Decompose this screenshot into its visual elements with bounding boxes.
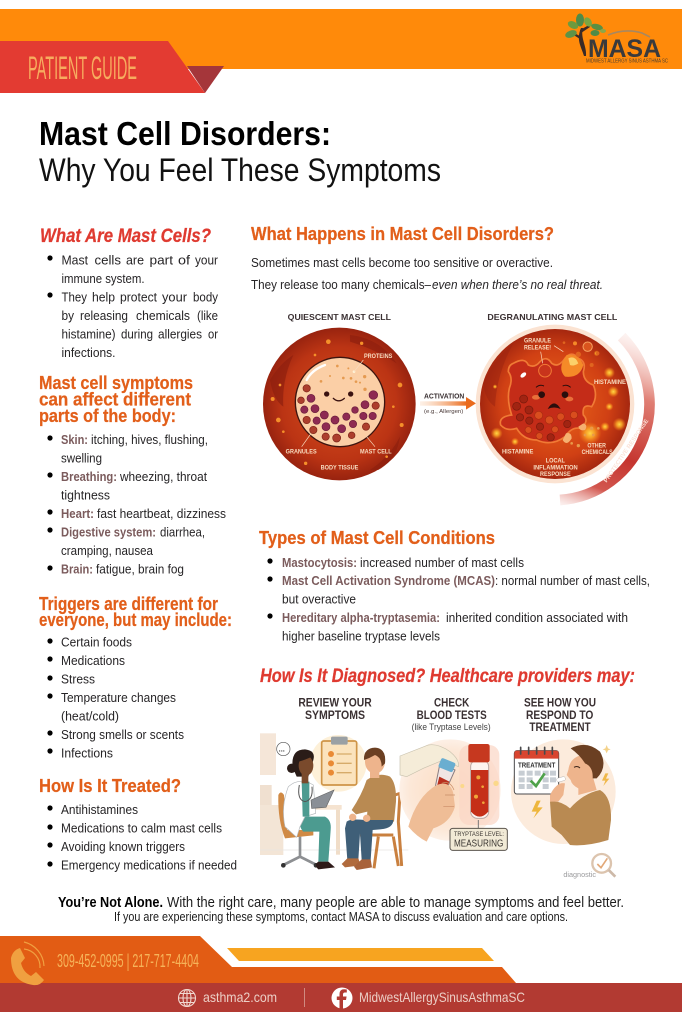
- panel: types: inherited condition associated with: [446, 610, 628, 625]
- diagram labels: QUIESCENT MAST CELL: [288, 312, 391, 322]
- panel: treatment: Medications to calm mast cells: [61, 820, 222, 836]
- closing message: With the right care, many people are able to manage symptoms and feel better.: [167, 895, 624, 911]
- panel: symptoms: [39, 372, 226, 576]
- diagram labels: [288, 312, 617, 322]
- panel: what are mast cells: allergies: [158, 326, 202, 342]
- panel: triggers: Strong smells or scents: [61, 727, 184, 742]
- panel: triggers: Stress: [61, 672, 95, 686]
- panel: triggers: [39, 593, 232, 760]
- panel: what are mast cells: or: [208, 326, 219, 342]
- footer shapes: [0, 936, 682, 1012]
- step 2: check blood tests: [399, 697, 507, 850]
- header band: [0, 9, 682, 69]
- panel: symptoms: Mast cell symptoms: [39, 372, 193, 393]
- facebook: MidwestAllergySinusAsthmaSC: [359, 989, 525, 1005]
- diagnostic watermark: diagnostic: [563, 872, 597, 879]
- degranulating mast cell: [476, 325, 634, 483]
- degranulating mast cell: INFLAMMATION: [533, 465, 578, 471]
- degranulating mast cell: RELEASE!: [524, 346, 551, 352]
- panel: triggers: (heat/cold): [61, 708, 119, 724]
- panel: what happens: Sometimes mast cells become too sensitive or overactive.: [251, 255, 553, 270]
- mast cell body: [295, 357, 385, 447]
- facebook: [332, 988, 525, 1008]
- panel: triggers: Infections: [61, 746, 113, 760]
- panel: symptoms: itching, hives, flushing,: [91, 432, 208, 447]
- degranulating mast cell: RESPONSE: [540, 472, 571, 478]
- panel: symptoms: Digestive system:: [61, 524, 156, 540]
- panel: triggers: Certain foods: [61, 634, 132, 650]
- lightning bolts: [532, 745, 611, 818]
- diagnostic watermark: [563, 854, 615, 879]
- website: asthma2.com: [203, 989, 277, 1005]
- burst glow: [491, 350, 626, 446]
- cell blob: [500, 341, 600, 447]
- panel: symptoms: Brain:: [61, 562, 93, 576]
- activation arrow: [420, 391, 476, 415]
- step 3: see how you respond: TREATMENT: [529, 721, 591, 734]
- panel: symptoms: Breathing:: [61, 469, 117, 484]
- diagram labels: DEGRANULATING MAST CELL: [487, 312, 617, 322]
- panel: symptoms: parts of the body:: [39, 405, 176, 426]
- quiescent mast cell: PROTEINS: [364, 353, 392, 360]
- closing message: You’re Not Alone.: [58, 895, 163, 911]
- man taking medication: [550, 745, 611, 845]
- panel: what are mast cells: your: [162, 290, 188, 304]
- title: Why You Feel These Symptoms: [39, 152, 441, 188]
- panel: treatment: Antihistamines: [61, 802, 138, 817]
- degranulating mast cell: LOCAL: [546, 459, 565, 465]
- panel: what are mast cells: histamine): [62, 326, 116, 342]
- panel: what are mast cells: of: [178, 252, 190, 268]
- step 3: see how you respond: RESPOND TO: [526, 709, 593, 722]
- panel: what are mast cells: What Are Mast Cells?: [40, 226, 211, 247]
- panel: types: Types of Mast Cell Conditions: [259, 527, 495, 548]
- panel: symptoms: Heart:: [61, 506, 94, 521]
- panel: what are mast cells: are: [126, 252, 144, 268]
- speech bubble: ...: [279, 744, 285, 753]
- icon: phone: [11, 942, 44, 985]
- panel: treatment: [39, 775, 237, 872]
- panel: what are mast cells: immune system.: [62, 271, 144, 286]
- panel: what are mast cells: body: [193, 290, 218, 304]
- panel: what are mast cells: cells: [94, 252, 121, 268]
- panel: types: [259, 527, 650, 644]
- step 3: see how you respond: [511, 697, 616, 845]
- panel: symptoms: diarrhea,: [160, 524, 205, 540]
- panel: symptoms: swelling: [61, 450, 102, 466]
- panel: symptoms: fatigue, brain fog: [96, 562, 184, 576]
- panel: what are mast cells: protect: [120, 290, 157, 304]
- phone numbers: 309-452-0995 | 217-717-4404: [57, 951, 199, 971]
- closing message: If you are experiencing these symptoms, contact MASA to discuss evaluation and care options.: [114, 910, 568, 924]
- speech bubble: [277, 742, 290, 756]
- tube in hand: [400, 745, 459, 842]
- degranulating mast cell: HISTAMINE: [502, 450, 533, 456]
- activation arrow: (e.g., Allergen): [424, 409, 464, 415]
- panel: treatment: How Is It Treated?: [39, 775, 181, 796]
- panel: triggers: Temperature changes: [61, 690, 176, 705]
- calendar: [514, 747, 559, 794]
- panel: types: Mastocytosis:: [282, 555, 357, 570]
- mast cell diagram: [263, 312, 650, 500]
- panel: what are mast cells: your: [195, 252, 219, 268]
- closing message: [58, 895, 624, 924]
- panel: what are mast cells: Mast: [62, 252, 88, 268]
- panel: types: increased number of mast cells: [360, 555, 524, 570]
- measuring label: TRYPTASE LEVEL:: [454, 831, 504, 838]
- panel: what are mast cells: releasing: [80, 308, 128, 323]
- panel: what are mast cells: infections.: [62, 345, 116, 360]
- panel: what are mast cells: [40, 226, 219, 360]
- step 2: check blood tests: (like Tryptase Levels): [412, 722, 491, 732]
- panel: types: but overactive: [282, 592, 356, 606]
- logo: MASA: [564, 14, 668, 64]
- panel: triggers: Medications: [61, 653, 125, 668]
- patient guide ribbon: [0, 41, 224, 93]
- protective response arc: PROTECTIVE RESPONSE: [603, 418, 650, 484]
- panel: what are mast cells: part: [150, 252, 173, 268]
- panel: treatment: Emergency medications if needed: [61, 858, 237, 872]
- patient guide ribbon: PATIENT GUIDE: [28, 50, 137, 86]
- protective response arc: [560, 337, 650, 500]
- panel: what are mast cells: help: [92, 290, 115, 304]
- panel: triggers: everyone, but may include:: [39, 609, 232, 630]
- panel: what happens: What Happens in Mast Cell Disorders?: [251, 223, 554, 244]
- calendar: TREATMENT: [518, 762, 556, 769]
- degranulating mast cell: OTHER: [587, 444, 607, 450]
- panel: symptoms: cramping, nausea: [61, 543, 154, 558]
- quiescent mast cell: MAST CELL: [360, 449, 392, 456]
- panel: what happens: [251, 223, 603, 292]
- panel: triggers: Triggers are different for: [39, 593, 218, 614]
- panel: what are mast cells: (like: [197, 308, 218, 323]
- panel: symptoms: tightness: [61, 488, 110, 502]
- clipboard: [322, 737, 357, 785]
- quiescent mast cell: GRANULES: [286, 449, 317, 456]
- panel: symptoms: Skin:: [61, 432, 88, 447]
- website: [178, 989, 277, 1006]
- panel: types: Mast Cell Activation Syndrome (MCAS): [282, 573, 495, 588]
- quiescent mast cell: BODY TISSUE: [321, 465, 358, 472]
- step 2: check blood tests: CHECK: [434, 697, 470, 710]
- step 1: review your symptoms: REVIEW YOUR: [298, 697, 372, 710]
- measuring label: [450, 820, 507, 850]
- panel: what are mast cells: by: [62, 308, 74, 323]
- patient: [342, 748, 402, 870]
- logo: MASA: MASA: [588, 35, 661, 63]
- title: [39, 115, 441, 188]
- blood tube: [459, 744, 499, 825]
- degranulating mast cell: CHEMICALS: [582, 450, 613, 456]
- divider: [304, 988, 306, 1007]
- panel: what happens: They release too many chemicals–: [251, 277, 432, 292]
- measuring label: MEASURING: [454, 839, 503, 850]
- panel: symptoms: can affect different: [39, 388, 191, 410]
- doctor: [278, 749, 335, 869]
- title: Mast Cell Disorders:: [39, 115, 331, 152]
- degranulating mast cell: HISTAMINE: [594, 380, 626, 386]
- quiescent mast cell: [263, 328, 416, 480]
- panel: symptoms: fast heartbeat, dizziness: [97, 506, 226, 521]
- activation arrow: ACTIVATION: [424, 391, 464, 400]
- panel: types: Hereditary alpha-tryptasemia:: [282, 610, 440, 625]
- panel: types: higher baseline tryptase levels: [282, 628, 440, 644]
- panel: what happens: even when there’s no real threat.: [432, 277, 603, 292]
- panel: treatment: Avoiding known triggers: [61, 839, 185, 854]
- panel: what are mast cells: chemicals: [136, 308, 190, 323]
- step 1: review your symptoms: [260, 697, 408, 870]
- step 3: see how you respond: SEE HOW YOU: [524, 697, 596, 710]
- panel: what are mast cells: They: [62, 290, 87, 304]
- panel: what are mast cells: during: [121, 326, 153, 342]
- step 2: check blood tests: BLOOD TESTS: [417, 709, 487, 722]
- degranulating mast cell: GRANULE: [524, 338, 551, 344]
- diagnosis illustration: [260, 697, 616, 879]
- step 1: review your symptoms: SYMPTOMS: [305, 709, 365, 722]
- panel: symptoms: wheezing, throat: [119, 469, 207, 484]
- panel: types: : normal number of mast cells,: [495, 573, 650, 588]
